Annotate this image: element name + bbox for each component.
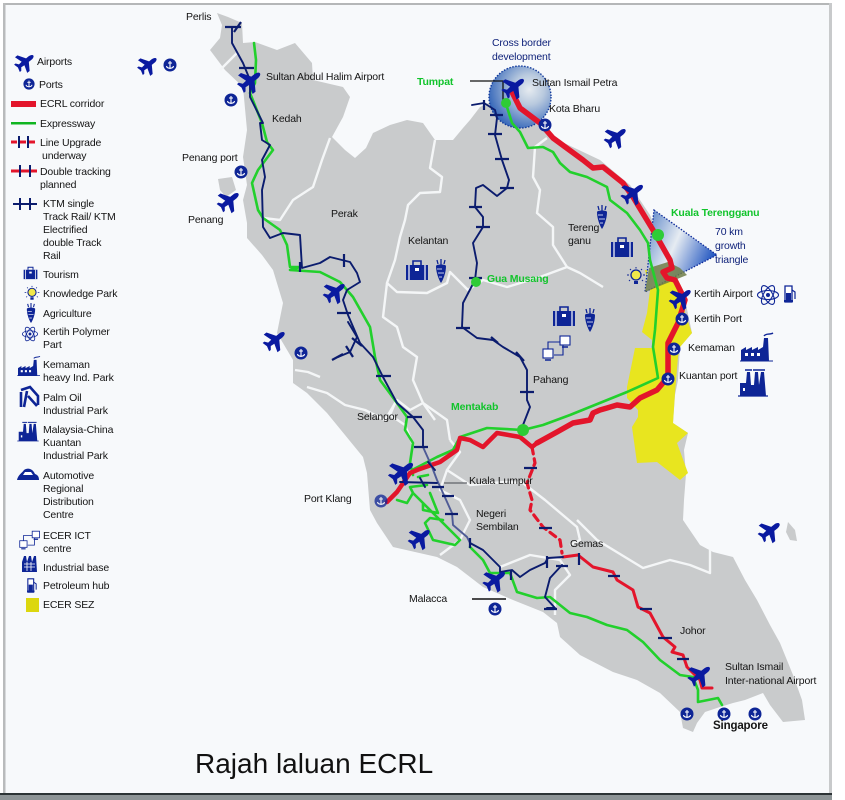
legend: double tracking planned <box>11 165 111 191</box>
legend: ports <box>23 78 63 91</box>
legend: double tracking planned: planned <box>40 179 77 191</box>
legend: agriculture <box>27 303 92 323</box>
legend: expressway <box>11 118 96 130</box>
legend: Kertih polymer park <box>22 326 110 351</box>
legend: line upgrade underway: Line Upgrade <box>40 137 102 149</box>
legend: double tracking planned: Double tracking <box>40 166 111 178</box>
green growth-centre labels: Tumpat <box>417 76 454 88</box>
legend: tourism: Tourism <box>43 269 79 281</box>
green growth-centre labels: Gua Musang <box>487 273 549 285</box>
legend: airports <box>11 48 72 76</box>
green growth-centre labels: Mentakab <box>451 401 498 413</box>
map place labels: Malacca <box>409 593 447 605</box>
Tioman island <box>786 522 797 541</box>
map place labels: Johor <box>680 625 706 637</box>
legend: airports: Airports <box>37 56 72 68</box>
green growth-centre labels <box>417 76 759 413</box>
expressway routes <box>250 43 722 705</box>
legend: knowledge park: Knowledge Park <box>43 288 118 300</box>
legend: expressway: Expressway <box>40 118 96 130</box>
map place labels: Kuala Lumpur <box>469 475 533 487</box>
legend: automotive regional distribution centre: Centre <box>43 509 74 521</box>
legend: Kertih polymer park: Part <box>43 339 62 351</box>
legend: Malaysia-China Kuantan industrial park: Kuantan <box>43 437 81 449</box>
green growth-centre labels: Kuala Terengganu <box>671 207 759 219</box>
legend: palm oil industrial park: Industrial Park <box>43 405 109 417</box>
legend: automotive regional distribution centre: Automotive <box>43 470 94 482</box>
legend: Malaysia-China Kuantan industrial park: Industrial Park <box>43 450 109 462</box>
legend: ECER SEZ <box>26 598 95 612</box>
callout text: cross border development: Cross border <box>492 37 552 49</box>
ECRL corridor <box>387 92 712 688</box>
map place labels: Kertih Airport <box>694 288 753 300</box>
ECER SEZ yellow zone <box>627 270 692 480</box>
legend: automotive regional distribution centre: Regional <box>43 483 83 495</box>
map place labels: Kota Bharu <box>549 103 600 115</box>
legend: ECER ICT centre <box>20 530 92 555</box>
map place labels: Perlis <box>186 11 211 23</box>
map place labels: Port Klang <box>304 493 352 505</box>
callout text: cross border development <box>492 37 552 63</box>
map place labels: Kelantan <box>408 235 449 247</box>
legend: KTM rail: Electrified <box>43 224 88 236</box>
map place labels: Inter-national Airport <box>725 675 816 687</box>
map place labels: Kedah <box>272 113 302 125</box>
legend: tourism <box>24 267 79 281</box>
map place labels: Singapore <box>713 720 768 732</box>
legend: ECER ICT centre: centre <box>43 543 72 555</box>
map place labels: Penang <box>188 214 224 226</box>
growth-centre dots <box>471 98 664 436</box>
legend: ECRL corridor: ECRL corridor <box>40 98 105 110</box>
port icons on map <box>164 58 762 720</box>
callout text: 70 km growth triangle: growth <box>715 240 746 252</box>
callout text: 70 km growth triangle: triangle <box>715 254 749 266</box>
map place labels: Sultan Ismail <box>725 661 783 673</box>
map place labels: Selangor <box>357 411 398 423</box>
legend: line upgrade underway <box>11 136 102 162</box>
KTM rail lines <box>225 22 689 659</box>
map place labels: Tereng <box>568 222 600 234</box>
sector icons on map <box>406 205 795 396</box>
legend: agriculture: Agriculture <box>43 308 92 320</box>
legend: palm oil industrial park <box>21 387 109 417</box>
map place labels: Kemaman <box>688 342 735 354</box>
map place labels: Sultan Abdul Halim Airport <box>266 71 384 83</box>
legend: line upgrade underway: underway <box>42 150 87 162</box>
map place labels: Kertih Port <box>694 313 742 325</box>
map place labels: ganu <box>568 235 591 247</box>
legend: KTM rail: Rail <box>43 250 60 262</box>
legend: KTM rail <box>13 198 116 262</box>
callout line: Malacca port <box>472 598 506 600</box>
legend: ECRL corridor <box>11 98 105 110</box>
callout line: Kuala Lumpur <box>444 482 467 484</box>
state borders <box>220 53 710 615</box>
cross border development circle <box>489 66 551 128</box>
legend: ports: Ports <box>39 79 63 91</box>
legend: Kemaman heavy industrial park: heavy Ind. Park <box>43 372 115 384</box>
Penang island <box>218 177 236 197</box>
map place labels: Gemas <box>570 538 603 550</box>
legend: petroleum hub: Petroleum hub <box>43 580 110 592</box>
title: Rajah laluan ECRL <box>195 748 433 779</box>
map place labels <box>182 11 816 732</box>
map place labels: Penang port <box>182 152 238 164</box>
callout text: cross border development: development <box>492 51 551 63</box>
legend: KTM rail: double Track <box>43 237 102 249</box>
legend: Kemaman heavy industrial park: Kemaman <box>43 359 90 371</box>
legend: palm oil industrial park: Palm Oil <box>43 392 81 404</box>
legend: industrial base <box>22 556 109 574</box>
map place labels: Kuantan port <box>679 370 738 382</box>
legend: automotive regional distribution centre <box>17 469 94 521</box>
line upgrade underway <box>527 447 562 553</box>
callout text: 70 km growth triangle <box>715 226 749 266</box>
legend: industrial base: Industrial base <box>43 562 109 574</box>
map place labels: Pahang <box>533 374 569 386</box>
airport icons on map <box>134 51 786 691</box>
legend: ECER ICT centre: ECER ICT <box>43 530 92 542</box>
legend: KTM rail: Track Rail/ KTM <box>43 211 116 223</box>
callout text: 70 km growth triangle: 70 km <box>715 226 743 238</box>
map place labels: Sultan Ismail Petra <box>532 77 618 89</box>
legend: ECER SEZ: ECER SEZ <box>43 599 95 611</box>
legend: Malaysia-China Kuantan industrial park: Malaysia-China <box>43 424 114 436</box>
legend: Malaysia-China Kuantan industrial park <box>17 422 114 462</box>
legend: Kemaman heavy industrial park <box>17 356 115 384</box>
legend: KTM rail: KTM single <box>43 198 94 210</box>
legend: knowledge park <box>25 286 118 300</box>
growth triangle <box>645 210 717 292</box>
legend: automotive regional distribution centre: Distribution <box>43 496 94 508</box>
callout line: Tumpat <box>470 81 503 102</box>
legend panel <box>11 48 118 612</box>
map place labels: Sembilan <box>476 521 519 533</box>
map: Peninsular Malaysia landmass <box>210 13 805 732</box>
map place labels: Perak <box>331 208 359 220</box>
legend: Kertih polymer park: Kertih Polymer <box>43 326 110 338</box>
map place labels: Negeri <box>476 508 506 520</box>
